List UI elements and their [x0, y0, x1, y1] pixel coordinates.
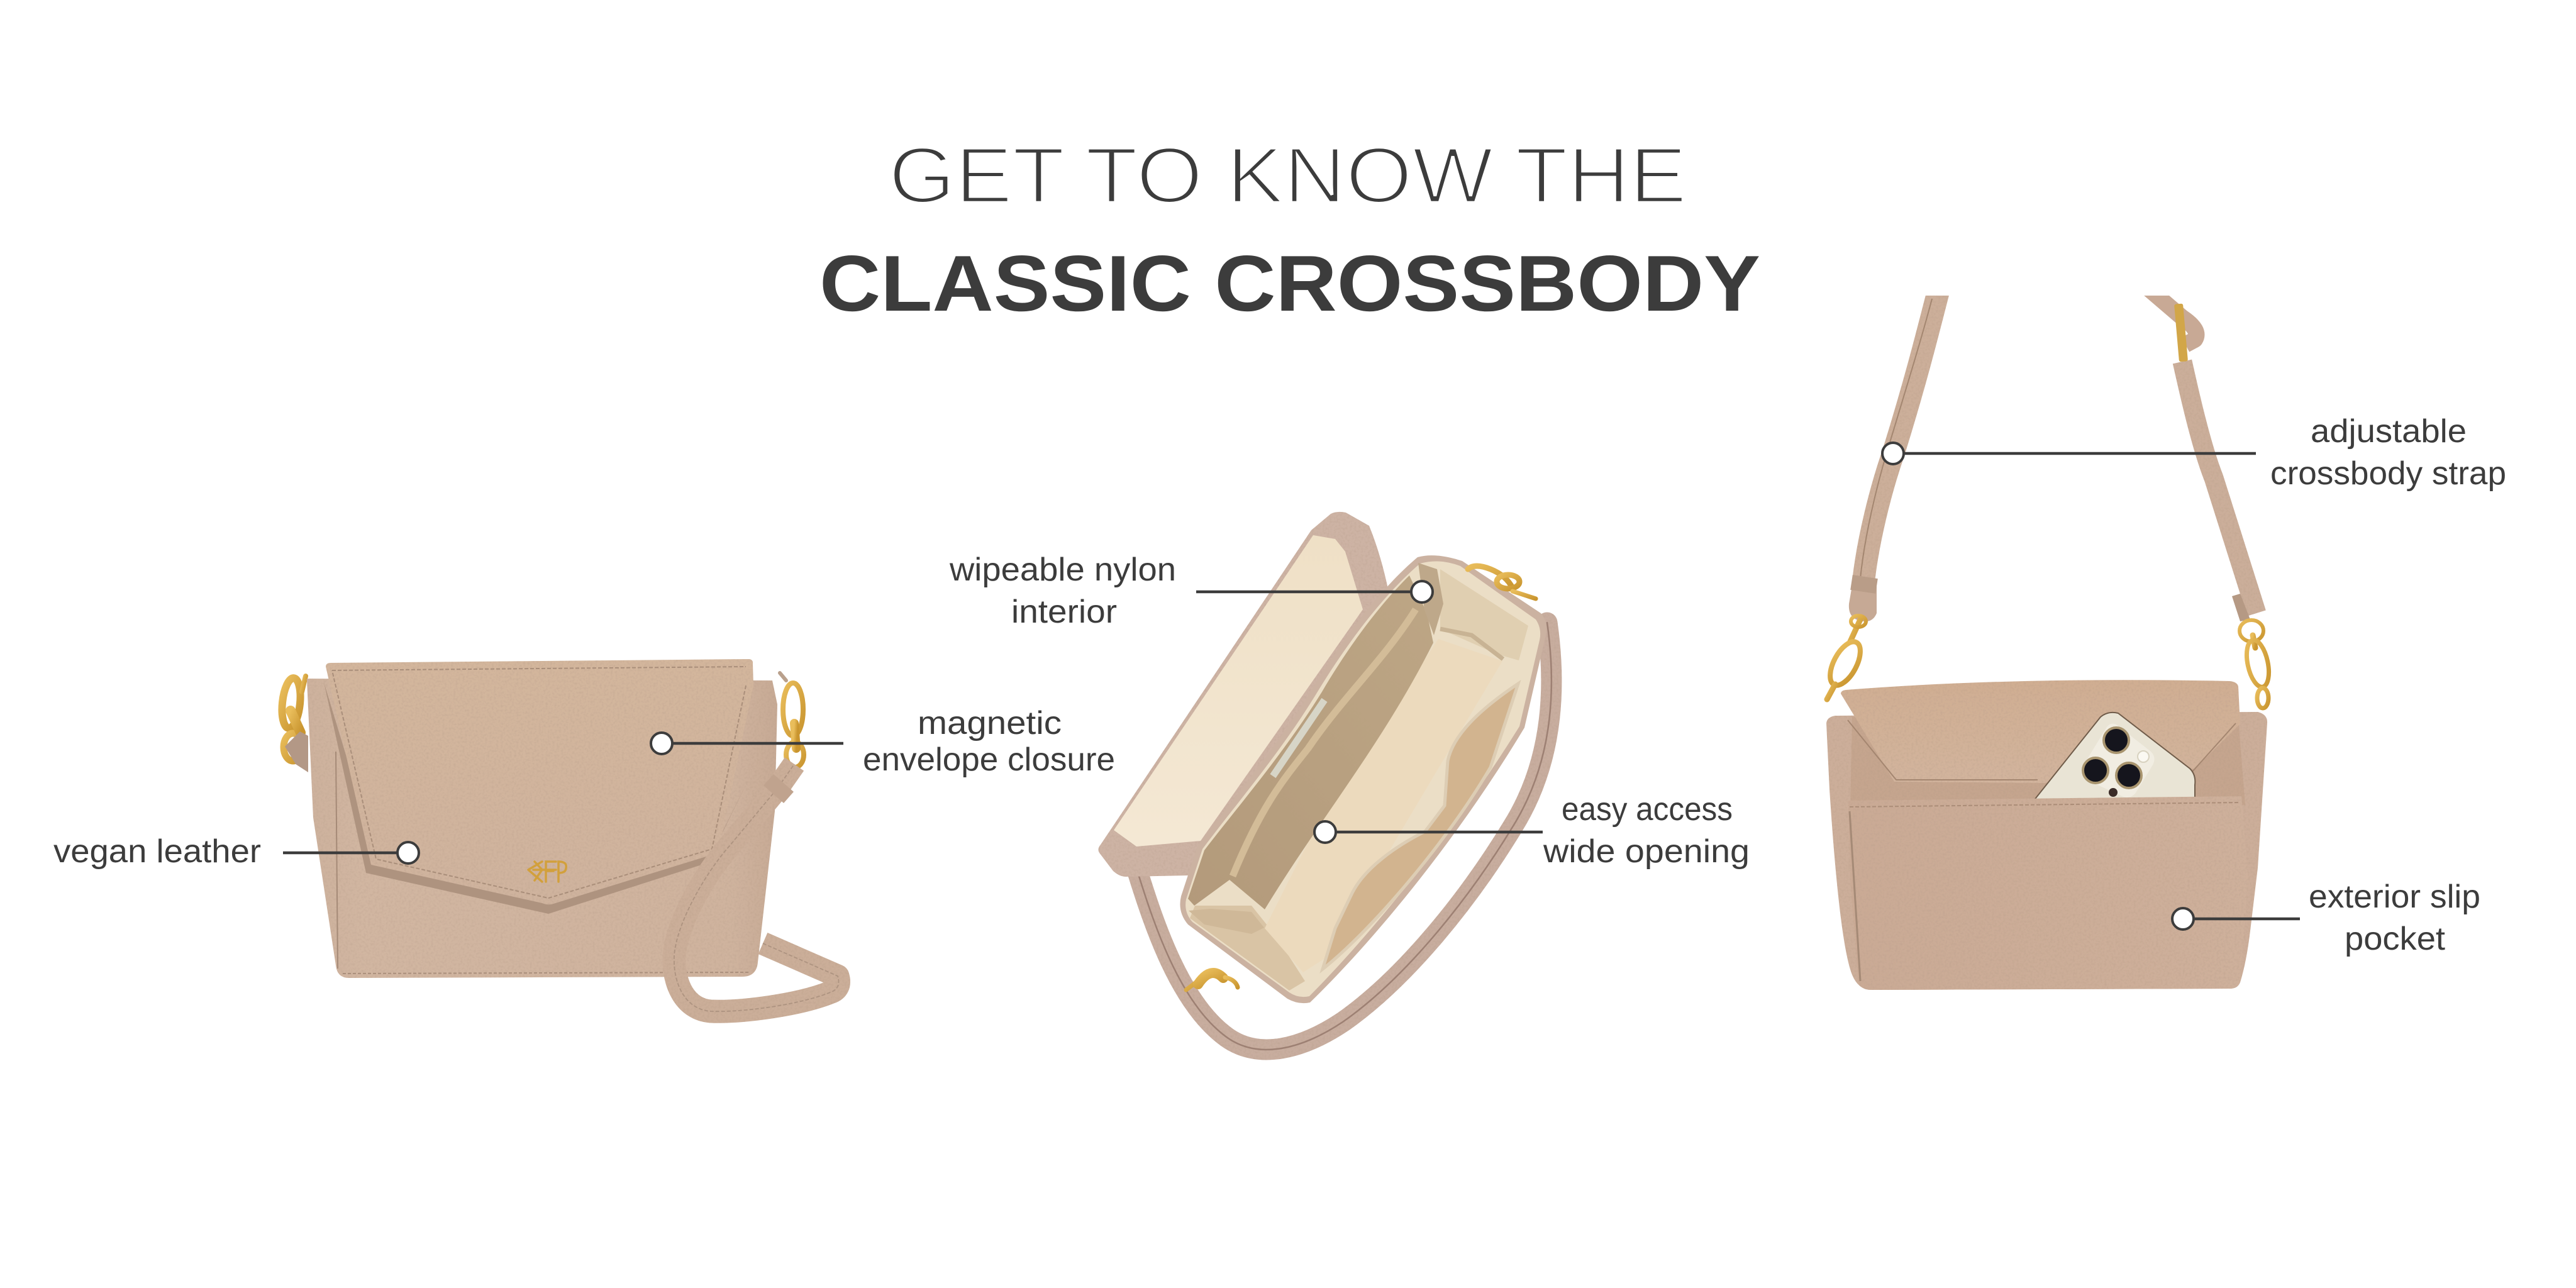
label: exterior slip — [2309, 879, 2480, 915]
callout: easy access wide opening: wide opening — [1543, 833, 1750, 870]
mic — [2109, 788, 2118, 797]
marker — [2172, 908, 2194, 930]
bottom clasp — [1186, 973, 1238, 990]
flap lining — [1114, 535, 1363, 847]
callout: vegan leather — [53, 833, 419, 870]
pocket seam — [1850, 802, 2240, 807]
phone — [2028, 713, 2195, 808]
zipper — [1233, 609, 1416, 876]
floor — [1265, 639, 1502, 972]
back wall — [1440, 569, 1528, 660]
panel: back of bag — [1824, 277, 2273, 990]
clasps — [1824, 616, 2273, 708]
label: easy access — [1562, 791, 1733, 828]
panel: inside of bag — [1098, 512, 1552, 1050]
right strap — [2182, 362, 2257, 613]
callout: easy access wide opening — [1314, 791, 1750, 870]
label: magnetic — [918, 705, 1062, 741]
label: wipeable nylon — [949, 552, 1176, 588]
left strap loop — [1849, 582, 1877, 621]
callout: adjustable crossbody strap: crossbody strap — [2270, 455, 2506, 492]
bag body — [307, 679, 777, 978]
leader — [2194, 918, 2300, 920]
panel: front of bag — [280, 659, 839, 1011]
bottom gathers — [1190, 906, 1305, 991]
right clasp back — [780, 673, 804, 767]
left clasp — [280, 676, 306, 761]
strap — [1138, 623, 1552, 1050]
flap outside — [1098, 512, 1388, 877]
bag lining — [1185, 562, 1540, 997]
flash — [2138, 751, 2149, 762]
flap stitching — [1848, 720, 2236, 780]
elastic — [1440, 629, 1503, 659]
camera island — [2082, 724, 2155, 797]
left strap tab — [285, 731, 308, 772]
flap shadow — [324, 682, 748, 914]
side seam — [336, 752, 338, 969]
pocket — [1323, 684, 1518, 969]
logo — [528, 862, 566, 882]
label: adjustable — [2311, 413, 2467, 450]
leader — [283, 852, 397, 854]
left strap — [1863, 277, 1942, 582]
strap — [674, 764, 839, 1011]
bottom seam — [343, 972, 748, 974]
callout: exterior slip pocket: pocket — [2345, 921, 2446, 957]
strap buckle — [2174, 304, 2188, 362]
left strap keeper — [1852, 582, 1877, 586]
lenses — [2083, 728, 2141, 788]
top clasp — [1468, 566, 1536, 599]
label: vegan leather — [53, 833, 261, 870]
marker — [1882, 443, 1904, 464]
flap — [1841, 680, 2240, 783]
callout: wipeable nylon interior: interior — [1011, 594, 1117, 630]
callout: magnetic envelope closure — [651, 705, 1115, 778]
leader — [672, 742, 843, 745]
title — [819, 131, 1760, 328]
marker — [397, 842, 419, 863]
leader — [1336, 831, 1543, 833]
pocket — [1848, 796, 2248, 990]
pocket shade — [1850, 811, 1860, 981]
body back — [1850, 711, 2245, 811]
marker — [1411, 581, 1433, 602]
leader — [1904, 452, 2256, 455]
leader — [1196, 591, 1411, 593]
wall pull cords — [1189, 909, 1264, 934]
bag body rim — [1180, 555, 1546, 1003]
straps — [1860, 277, 2257, 613]
body silhouette — [1826, 712, 2267, 990]
title line 1: GET TO KNOW THE — [889, 131, 1687, 219]
marker — [651, 733, 672, 754]
callout: magnetic envelope closure: envelope closure — [863, 741, 1115, 778]
callout: wipeable nylon interior — [949, 552, 1433, 630]
top gather — [1418, 563, 1443, 635]
flap stitching — [332, 667, 746, 898]
flap — [326, 659, 753, 904]
title line 2: CLASSIC CROSSBODY — [819, 239, 1760, 328]
care tag — [1273, 700, 1324, 776]
marker — [1314, 821, 1336, 843]
callout: exterior slip pocket — [2172, 879, 2480, 957]
right strap tab — [2232, 594, 2250, 621]
left wall — [1188, 575, 1433, 909]
callout: adjustable crossbody strap — [1882, 413, 2506, 492]
strap keeper — [769, 780, 789, 797]
